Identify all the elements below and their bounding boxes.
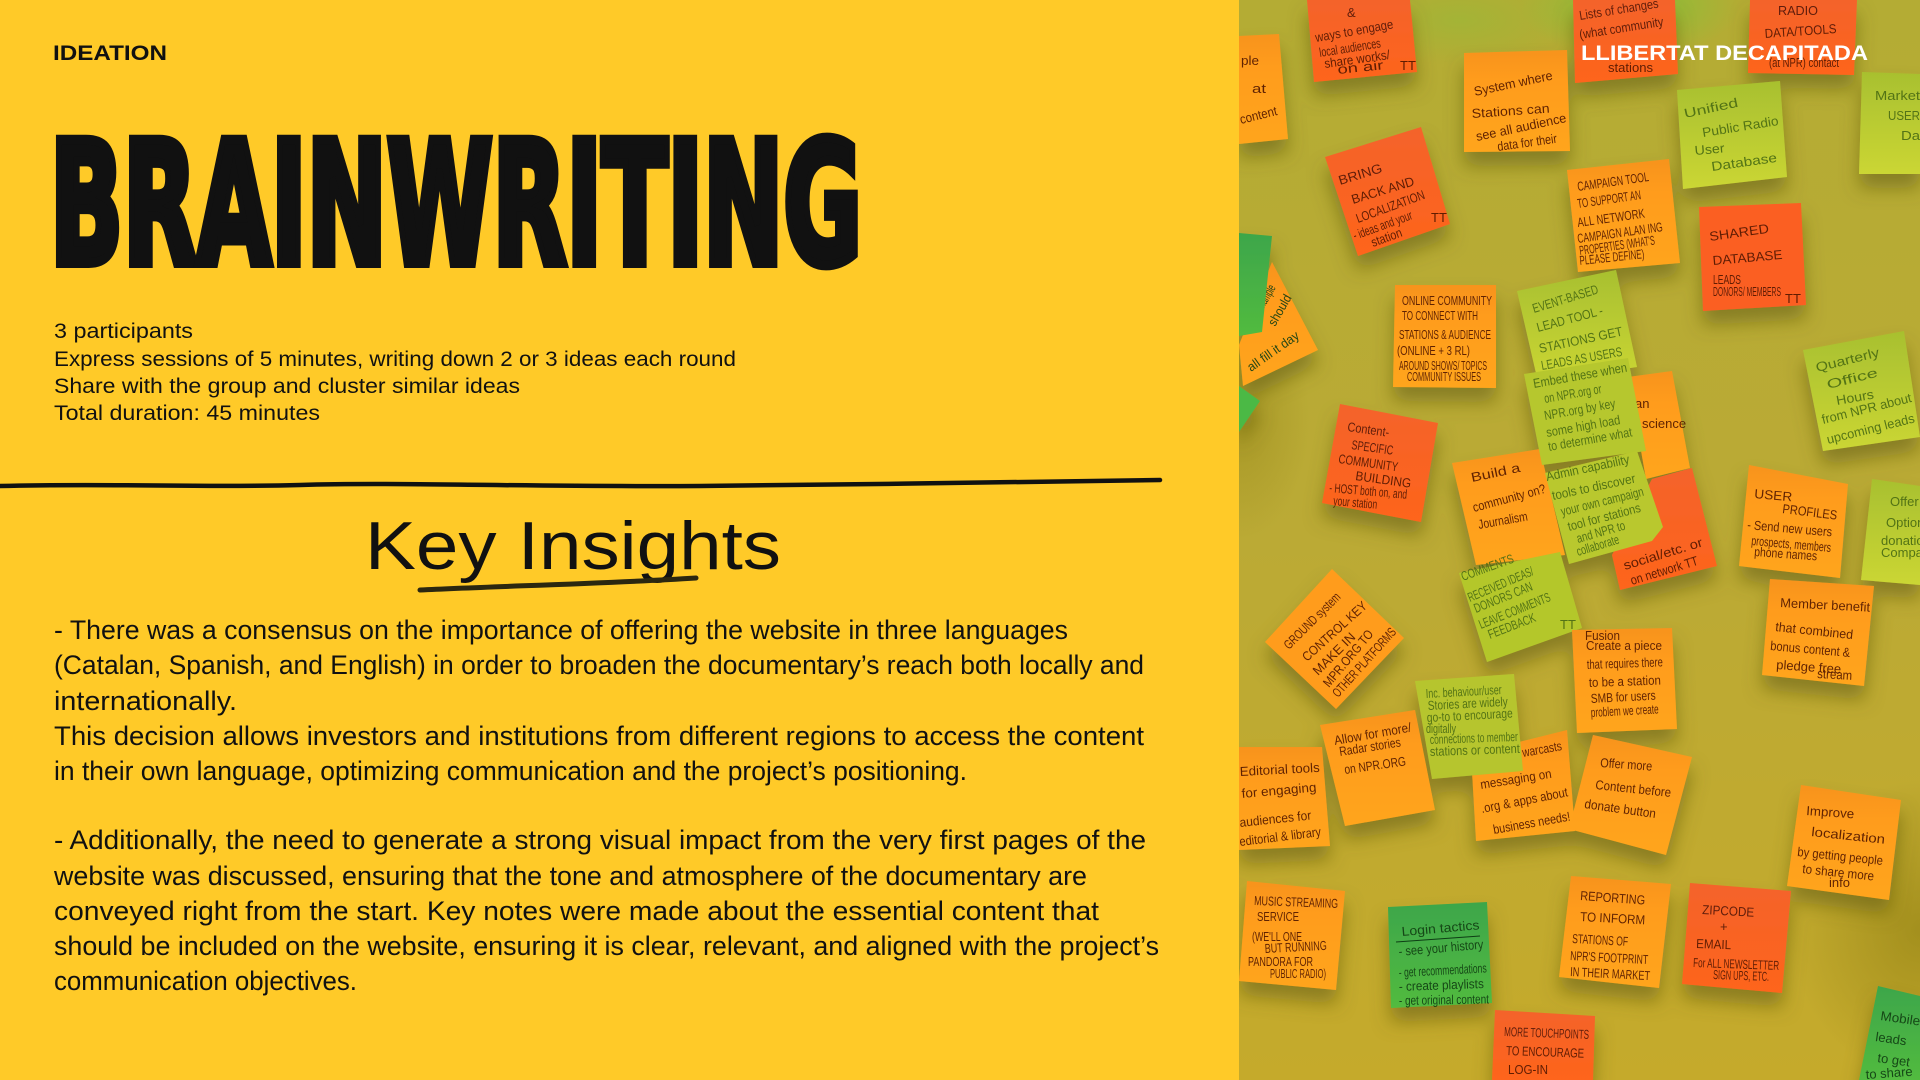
note: red behind stack: social/etc. or xyxy=(1621,534,1705,573)
note: member benefit: bonus content & xyxy=(1770,638,1851,660)
text block: key insights second point: should be included on the website, ensuring it is clear, relevant, and aligned with the project’s xyxy=(54,931,1159,961)
note: login tactics xyxy=(1388,902,1492,1008)
note: comments feedback: RECEIVED IDEAS/ xyxy=(1465,564,1536,605)
note: build a community: community on? xyxy=(1471,481,1547,515)
note: behaviour stories: Inc. behaviour/user xyxy=(1425,682,1503,701)
note: bring back localization: TT xyxy=(1431,210,1447,225)
note: online community xyxy=(1393,285,1496,388)
note: allow for more radio stories: Radar stories xyxy=(1338,734,1402,759)
note: shared database xyxy=(1699,203,1806,311)
note: fusion piece: problem we create xyxy=(1590,701,1659,720)
text block: session details: 3 participants xyxy=(54,320,193,343)
note: system where stations can see audience data xyxy=(1464,50,1570,154)
note: improve localization: to share more xyxy=(1802,861,1875,884)
note: embed stack upper: NPR.org by key xyxy=(1543,396,1617,423)
note: unified public radio user database: User xyxy=(1694,140,1726,158)
note: bring back localization: LOCALIZATION xyxy=(1354,187,1427,226)
text block: key insights first point xyxy=(54,615,1145,786)
note: admin capability stack lower: collaborate xyxy=(1574,532,1621,559)
note: unified public radio user database: Unified xyxy=(1683,95,1739,121)
note: behaviour stories xyxy=(1415,674,1523,779)
note: green left edge: should xyxy=(1265,292,1295,328)
note: quarterly office hours: upcoming leads xyxy=(1825,410,1917,447)
note: campaign tool: PLEASE DEFINE) xyxy=(1579,246,1645,268)
note: unified public radio user database xyxy=(1677,81,1787,189)
note: quarterly office hours xyxy=(1803,331,1920,451)
note: comments feedback xyxy=(1459,551,1582,662)
note: editorial tools xyxy=(1239,747,1330,850)
note: admin capability stack lower: tool for stations xyxy=(1566,500,1643,534)
note: system where stations can see audience data: data for their xyxy=(1496,131,1558,154)
note: offer options donations xyxy=(1861,479,1920,585)
note: left edge content: at xyxy=(1252,81,1266,96)
note: event-based lead tool: LEADS AS USERS xyxy=(1540,344,1624,373)
heading: Key Insights: Key Insights xyxy=(365,508,781,584)
note: webcasts messaging: .org & apps about xyxy=(1480,784,1569,816)
sticky notes group xyxy=(1238,0,1920,1080)
note: music streaming service: PUBLIC RADIO) xyxy=(1270,966,1326,981)
note: system where stations can see audience data: System where xyxy=(1473,68,1554,99)
note: campaign tool: CAMPAIGN ALAN ING xyxy=(1576,219,1664,246)
note: online community: AROUND SHOWS/ TOPICS xyxy=(1399,358,1487,373)
note: campaign tool: TO SUPPORT AN xyxy=(1576,187,1642,211)
note: fusion piece xyxy=(1572,628,1677,733)
note: unified public radio user database: Database xyxy=(1710,150,1778,174)
note: lists of changes xyxy=(1573,0,1678,83)
note: radio data tools: (at NPR) contact xyxy=(1769,55,1839,70)
note: more touchpoints to encourage log-in xyxy=(1492,1010,1595,1080)
note: offer more content before donate button: Content before xyxy=(1595,777,1672,800)
hand-drawn divider line xyxy=(0,480,1160,486)
note: embed stack upper: to determine what xyxy=(1547,424,1634,454)
note: user profiles: phone names xyxy=(1754,544,1818,563)
note: bring back localization: BACK AND xyxy=(1349,174,1416,207)
text block: key insights first point: in their own language, optimizing communication and the project’s positioning. xyxy=(54,756,967,786)
note: zipcode and email: SIGN UPS, ETC. xyxy=(1713,967,1769,984)
note: editorial tools: editorial & library xyxy=(1239,824,1322,849)
note: behaviour stories: digitally xyxy=(1426,721,1456,736)
note: content-specific community building: your station xyxy=(1333,493,1378,512)
note: music streaming service: PANDORA FOR xyxy=(1248,954,1313,969)
note: zipcode and email: ZIPCODE xyxy=(1702,902,1755,920)
note: orange behind stack: an xyxy=(1635,396,1649,411)
text block: key insights second point xyxy=(53,825,1159,996)
text block: key insights first point: internationally. xyxy=(54,686,237,716)
note: embed stack upper: some high load xyxy=(1545,412,1621,440)
section label: IDEATION: IDEATION xyxy=(53,42,167,65)
note: embed stack upper: on NPR.org or xyxy=(1543,381,1603,406)
note: member benefit xyxy=(1762,579,1874,686)
note: comments feedback: TT xyxy=(1560,617,1576,632)
note: music streaming service: BUT RUNNING xyxy=(1264,938,1327,956)
note: ways to engage: share works/ xyxy=(1323,47,1391,71)
note: green left edge xyxy=(1239,233,1318,432)
note: member benefit: that combined xyxy=(1775,619,1854,642)
note: build a community: Build a xyxy=(1470,460,1522,485)
note: member benefit: pledge free xyxy=(1776,657,1842,677)
note: market user database: Da xyxy=(1901,128,1920,143)
note: online community: STATIONS & AUDIENCE xyxy=(1399,327,1491,342)
note: bring back localization: station xyxy=(1369,225,1404,250)
note: bring back localization: - ideas and your xyxy=(1351,207,1415,243)
note: market user database xyxy=(1859,72,1920,174)
note: improve localization: localization xyxy=(1811,824,1886,847)
note: lists of changes: stations xyxy=(1608,60,1653,75)
note: improve localization: by getting people xyxy=(1797,844,1884,868)
note: editorial tools: Editorial tools xyxy=(1239,760,1321,779)
note: admin capability stack lower: and NPR to xyxy=(1575,518,1627,546)
note: editorial tools: for engaging xyxy=(1241,780,1317,801)
text block: key insights first point: - There was a consensus on the importance of offering the website in three languages xyxy=(54,615,1068,645)
note: fusion piece: Create a piece xyxy=(1586,638,1662,653)
note: webcasts messaging: business needs! xyxy=(1492,809,1571,837)
note: comments feedback: DONORS CAN xyxy=(1472,579,1535,616)
note: ground system control xyxy=(1265,569,1404,709)
note: member benefit: stream xyxy=(1817,666,1853,683)
note: zipcode and email: + xyxy=(1720,919,1728,934)
note: fusion piece: to be a station xyxy=(1589,672,1661,690)
note: radio data tools xyxy=(1748,0,1857,75)
text block: key insights second point: website was discussed, ensuring that the tone and atmosphere of the documentary are xyxy=(53,861,1087,891)
note: shared database: TT xyxy=(1785,291,1801,306)
note: online community: (ONLINE + 3 RL) xyxy=(1397,343,1470,358)
note: user profiles xyxy=(1739,465,1848,578)
note: content-specific community building: - HOST both on, and xyxy=(1329,480,1408,502)
note: radio data tools: DATA/TOOLS xyxy=(1764,21,1837,41)
note: improve localization: info xyxy=(1829,875,1850,890)
note: ground system control: OTHER PLATFORMS xyxy=(1329,624,1399,700)
note: improve localization xyxy=(1787,785,1901,900)
note: mobile leads: leads xyxy=(1875,1029,1908,1048)
note: music streaming service: SERVICE xyxy=(1257,909,1299,924)
note: mobile leads: to get xyxy=(1877,1050,1911,1070)
note: orange behind stack: science xyxy=(1642,416,1686,431)
note: improve localization: Improve xyxy=(1806,803,1855,821)
note: campaign tool: PROPERTIES (WHAT'S xyxy=(1578,233,1656,258)
note: ways to engage: TT xyxy=(1400,58,1416,73)
note: behaviour stories: connections to member xyxy=(1430,729,1518,747)
text block: key insights first point: This decision allows investors and institutions from different regions to access the content xyxy=(54,721,1145,751)
note: behaviour stories: go-to to encourage xyxy=(1426,706,1513,725)
note: offer more content before donate button xyxy=(1569,735,1692,855)
note: login tactics: - create playlists xyxy=(1399,976,1485,994)
note: orange behind stack xyxy=(1628,371,1690,479)
note: allow for more radio stories xyxy=(1320,710,1435,826)
note: build a community xyxy=(1452,449,1565,565)
note: login tactics: - get original content xyxy=(1399,991,1489,1008)
note: bring back localization: BRING xyxy=(1336,160,1384,188)
note: content-specific community building: SPECIFIC xyxy=(1351,437,1394,458)
panel: yellow content background xyxy=(0,0,1239,1080)
note: login tactics: - get recommendations xyxy=(1398,960,1487,980)
note: reporting to inform stations: IN THEIR MARKET xyxy=(1570,964,1651,983)
text block: session details xyxy=(54,320,736,425)
note: admin capability stack lower: tools to discover xyxy=(1551,470,1637,503)
note: reporting to inform stations: TO INFORM xyxy=(1580,909,1646,927)
note: red behind stack xyxy=(1612,468,1717,590)
note: ways to engage xyxy=(1307,0,1417,82)
note: more touchpoints to encourage log-in: TO ENCOURAGE xyxy=(1506,1043,1585,1061)
note: quarterly office hours: Quarterly xyxy=(1814,344,1881,375)
note: quarterly office hours: Office xyxy=(1825,365,1879,392)
text block: key insights second point: - Additionally, the need to generate a strong visual impact from the very first pages of the xyxy=(54,825,1146,855)
text block: session details: Express sessions of 5 minutes, writing down 2 or 3 ideas each round xyxy=(54,348,736,371)
note: system where stations can see audience data: Stations can xyxy=(1471,101,1550,121)
text block: key insights second point: communication objectives. xyxy=(54,966,357,996)
note: webcasts messaging: messaging on xyxy=(1479,766,1553,792)
note: quarterly office hours: from NPR about xyxy=(1820,390,1913,427)
note: reporting to inform stations: REPORTING xyxy=(1580,888,1646,908)
note: behaviour stories: Stories are widely xyxy=(1427,694,1508,713)
note: event-based lead tool: EVENT-BASED xyxy=(1530,282,1600,316)
note: content-specific community building: COMMUNITY xyxy=(1338,451,1399,474)
text block: key insights first point: (Catalan, Spanish, and English) in order to broaden the documentary’s reach both locally and xyxy=(54,650,1144,680)
note: user profiles: PROFILES xyxy=(1782,501,1838,523)
note: user profiles: prospects, members xyxy=(1751,533,1832,555)
note: zipcode and email xyxy=(1682,883,1791,993)
note: embed stack upper xyxy=(1524,358,1646,465)
note: ground system control: MAKE IN xyxy=(1310,629,1358,678)
note: left edge content xyxy=(1238,34,1288,144)
text block: session details: Share with the group and cluster similar ideas xyxy=(54,375,520,398)
note: shared database: LEADS xyxy=(1713,272,1741,287)
text block: key insights second point: conveyed right from the start. Key notes were made about the essential content that xyxy=(54,896,1100,926)
note: build a community: Journalism xyxy=(1477,508,1529,532)
note: green left edge: all fill it day xyxy=(1244,327,1302,374)
note: ways to engage: & xyxy=(1347,5,1356,20)
note: online community: COMMUNITY ISSUES xyxy=(1407,369,1481,384)
note: event-based lead tool: LEAD TOOL - xyxy=(1535,303,1604,335)
note: content-specific community building: BUILDING xyxy=(1355,468,1412,491)
note: ground system control: MPR.ORG TO xyxy=(1320,627,1376,690)
note: member benefit: Member benefit xyxy=(1780,595,1871,615)
note: radio data tools: RADIO xyxy=(1778,3,1818,18)
note: webcasts messaging: warcasts xyxy=(1520,738,1563,760)
note: user profiles: - Send new users xyxy=(1747,517,1833,539)
note: shared database: SHARED xyxy=(1708,221,1770,244)
note: fusion piece: that requires there xyxy=(1587,654,1663,672)
text block: session details: Total duration: 45 minutes xyxy=(54,402,320,425)
note: content-specific community building xyxy=(1322,404,1438,522)
note: more touchpoints to encourage log-in: LOG-IN xyxy=(1508,1062,1548,1077)
note: shared database: DONORS/ MEMBERS xyxy=(1713,284,1781,299)
note: music streaming service xyxy=(1239,881,1345,990)
note: lists of changes: (what community xyxy=(1578,14,1665,42)
note: ground system control: GROUND system xyxy=(1281,589,1343,652)
note: bring back localization xyxy=(1325,127,1450,256)
note: zipcode and email: For ALL NEWSLETTER xyxy=(1693,955,1779,973)
note: allow for more radio stories: on NPR.ORG xyxy=(1343,753,1407,777)
note: event-based lead tool xyxy=(1517,270,1637,382)
note: zipcode and email: EMAIL xyxy=(1696,936,1731,952)
note: allow for more radio stories: Allow for more/ xyxy=(1333,720,1413,748)
heading underline stroke xyxy=(420,578,696,590)
note: ways to engage: ways to engage xyxy=(1313,16,1394,45)
title: BRAINWRITING: BRAINWRITING xyxy=(50,106,862,303)
note: comments feedback: LEAVE COMMENTS xyxy=(1477,589,1553,632)
note: behaviour stories: stations or content xyxy=(1430,741,1520,759)
note: offer more content before donate button: Offer more xyxy=(1600,755,1653,774)
note: campaign tool xyxy=(1567,159,1680,272)
note: campaign tool: ALL NETWORK xyxy=(1576,206,1646,230)
note: event-based lead tool: STATIONS GET xyxy=(1538,324,1624,356)
note: music streaming service: MUSIC STREAMING xyxy=(1254,893,1338,911)
note: login tactics: - see your history xyxy=(1398,937,1484,959)
note: mobile leads xyxy=(1859,986,1920,1080)
note: ways to engage: on air xyxy=(1337,57,1385,77)
note: system where stations can see audience data: see all audience xyxy=(1475,110,1568,144)
note: reporting to inform stations: NPR'S FOOTPRINT xyxy=(1570,948,1649,967)
note: market user database: Market xyxy=(1875,88,1920,103)
note: editorial tools: audiences for xyxy=(1239,807,1313,830)
note: green left edge: Example xyxy=(1252,282,1279,314)
note: left edge content: content xyxy=(1238,103,1279,127)
note: ways to engage: local audiences xyxy=(1318,35,1382,60)
note: online community: ONLINE COMMUNITY xyxy=(1402,293,1492,308)
note: ground system control: CONTROL KEY xyxy=(1299,598,1370,664)
note: webcasts messaging xyxy=(1471,730,1575,841)
note: user profiles: USER xyxy=(1754,486,1793,504)
note: offer options donations: Offer xyxy=(1890,494,1919,509)
note: admin capability stack lower: Admin capability xyxy=(1545,451,1631,484)
note: online community: TO CONNECT WITH xyxy=(1402,308,1478,323)
note: comments feedback: FEEDBACK xyxy=(1486,610,1538,642)
note: content-specific community building: Content- xyxy=(1347,419,1390,440)
note: admin capability stack lower xyxy=(1545,451,1663,564)
note: campaign tool: CAMPAIGN TOOL xyxy=(1576,169,1650,194)
note: fusion piece: SMB for users xyxy=(1590,688,1656,706)
note: fusion piece: Fusion xyxy=(1585,628,1620,643)
note: comments feedback: COMMENTS xyxy=(1459,551,1516,584)
note: left edge content: ple xyxy=(1241,53,1259,68)
note: admin capability stack lower: your own campaign xyxy=(1559,484,1645,519)
note: embed stack upper: Embed these when xyxy=(1532,360,1628,391)
note: reporting to inform stations: STATIONS OF xyxy=(1572,931,1629,949)
note: red behind stack: on network TT xyxy=(1628,553,1700,588)
note: offer more content before donate button: donate button xyxy=(1584,796,1657,821)
note: login tactics: Login tactics xyxy=(1401,917,1480,939)
note: more touchpoints to encourage log-in: MORE TOUCHPOINTS xyxy=(1504,1024,1590,1042)
note: reporting to inform stations xyxy=(1559,876,1671,988)
note: music streaming service: (WE'LL ONE xyxy=(1252,929,1302,944)
brand label: LLIBERTAT DECAPITADA: LLIBERTAT DECAPITADA xyxy=(1581,42,1868,65)
note: shared database: DATABASE xyxy=(1712,247,1783,268)
note: mobile leads: Mobile xyxy=(1880,1008,1920,1029)
note: quarterly office hours: Hours xyxy=(1835,386,1875,408)
note: unified public radio user database: Public Radio xyxy=(1701,113,1780,140)
photo panel: sticky notes on wall xyxy=(1170,0,1920,1080)
